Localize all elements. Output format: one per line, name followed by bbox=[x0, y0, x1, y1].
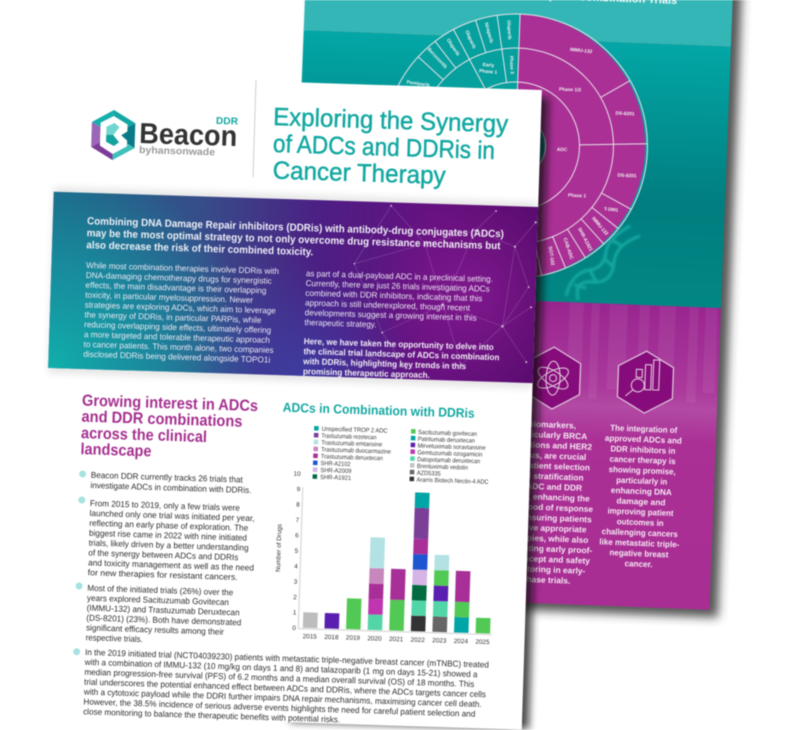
x axis labels: 2019 bbox=[346, 635, 361, 642]
bullet: tracked trials: investigate ADCs in combination with DDRis. bbox=[90, 480, 252, 495]
band magenta glow bbox=[48, 192, 538, 383]
band intro statement: also decrease the risk of their combined toxicity. bbox=[86, 240, 314, 258]
band right column text: the clinical trial landscape of ADCs in combination bbox=[303, 346, 500, 362]
wheel labels: Olaparib bbox=[445, 38, 461, 57]
back page shadow bbox=[290, 0, 744, 618]
chart legend: SHR-A1921 bbox=[320, 474, 352, 482]
DNA helix decoration bbox=[566, 226, 640, 300]
column two text: integration bbox=[598, 422, 684, 570]
bullet: most explored ADCs: respective trials. bbox=[86, 632, 143, 644]
column two text: integration: outcomes in bbox=[617, 516, 664, 528]
bullet: most explored ADCs bbox=[74, 582, 243, 647]
column two text: integration: approved ADCs and bbox=[605, 433, 682, 446]
wheel labels: CAB-ADC bbox=[562, 237, 574, 261]
front page sheet bbox=[37, 75, 542, 730]
sunburst chart bbox=[384, 14, 648, 278]
section heading bbox=[80, 393, 258, 464]
column two text: integration: like metastatic triple- bbox=[599, 536, 680, 549]
title: Cancer Therapy bbox=[272, 157, 447, 190]
bullet: 2019 trial: However, the 38.5% incidence of serious adverse events highlights the need for careful patient selection and bbox=[83, 696, 476, 719]
x axis labels: 2023 bbox=[432, 637, 447, 645]
teal panel background bbox=[294, 30, 731, 308]
band right column text bbox=[302, 268, 502, 382]
chart legend: SHR-A2009 bbox=[320, 467, 352, 475]
band left column text: reducing overlapping side effects, ultimately offering bbox=[84, 319, 272, 335]
bullet: most explored ADCs: significant efficacy results among their bbox=[86, 622, 224, 637]
section heading: and DDR combinations bbox=[81, 409, 243, 431]
column two text: integration: challenging cancers bbox=[602, 526, 678, 539]
bullet: most explored ADCs: (IMMU-132) and Trastuzumab Deruxtecan bbox=[87, 603, 240, 617]
band left column text: strategies are exploring ADCs, which aim to leverage bbox=[85, 299, 276, 316]
magenta panel background bbox=[282, 292, 721, 610]
bullet: trial timing: for new therapies for resistant cancers. bbox=[88, 567, 238, 582]
bars bbox=[303, 489, 494, 634]
band blue glow bbox=[48, 192, 538, 383]
column two text: integration: damage and bbox=[616, 496, 666, 507]
axes bbox=[298, 487, 496, 635]
column one text: biomarkers: and stratification bbox=[516, 470, 584, 483]
column one text: biomarkers: phase trials. bbox=[521, 574, 571, 586]
chart legend: Trastuzumab rezetecan bbox=[321, 433, 377, 441]
column two text: integration: cancer therapy is bbox=[609, 454, 676, 466]
chart legend: Trastuzumab duocarmazine bbox=[321, 446, 392, 456]
wheel labels: SHR-A1921 bbox=[576, 227, 594, 253]
divider bbox=[253, 80, 256, 177]
bullet: trial timing: reflecting an early phase of exploration. The bbox=[89, 518, 249, 533]
y axis labels: 3 bbox=[294, 579, 298, 586]
band left column text: effects, the main disadvantage is their overlapping bbox=[85, 280, 267, 295]
band right column text: combined with DDR inhibitors, indicating that this bbox=[305, 288, 482, 303]
column two icon: magnifier and bars hexagon bbox=[617, 350, 674, 414]
x axis labels: 2025 bbox=[475, 639, 490, 646]
band right column text: approach is still underexplored, though recent bbox=[305, 298, 471, 313]
band teal corner bbox=[48, 192, 538, 383]
chart legend bbox=[312, 425, 491, 486]
wheel labels: DS-8201 bbox=[617, 173, 637, 179]
bullet: 2019 trial: close monitoring to balance the therapeutic benefits with potential risks. bbox=[83, 706, 340, 724]
chart legend: Mirvetuximab soravtansine bbox=[417, 443, 486, 452]
band right column text: developments suggest a growing interest in this bbox=[305, 307, 477, 323]
column two text: integration: improving patient bbox=[607, 505, 674, 518]
band network nodes bbox=[350, 204, 537, 373]
x axis labels: 2015 bbox=[303, 633, 317, 641]
title: Exploring the Synergy bbox=[273, 103, 509, 138]
band right column text: with DDRis, highlighting key trends in this bbox=[302, 356, 467, 371]
y axis labels: 8 bbox=[296, 502, 300, 509]
bullet: trial timing: and toxicity management as well as the need bbox=[88, 557, 254, 573]
logo hexagon mark bbox=[91, 109, 136, 161]
band left column text: a more targeted and tolerable therapeutic approach bbox=[84, 329, 270, 345]
bullet: most explored ADCs: years explored Sacituzumab Govitecan bbox=[87, 593, 229, 607]
bullet: most explored ADCs: (DS-8201) (23%). Both have demonstrated bbox=[86, 612, 242, 627]
teal half of wheel bbox=[384, 14, 648, 278]
bullet: 2019 trial bbox=[71, 647, 489, 729]
wheel labels: Early bbox=[482, 62, 495, 69]
logo byline: byhansonwade bbox=[139, 145, 216, 158]
band left column text: disclosed DDRis being delivered alongside TOPO1i bbox=[83, 349, 271, 365]
bullet: trial timing: of the synergy between ADCs and DDRIs bbox=[88, 548, 238, 562]
band left column text: While most combination therapies involve DDRis with bbox=[86, 260, 280, 276]
band background bbox=[48, 192, 538, 383]
band right column text: therapeutic strategy. bbox=[304, 317, 377, 329]
band intro statement bbox=[86, 216, 504, 264]
column two text: integration: negative breast bbox=[609, 547, 669, 559]
y axis title: Number of Drugs bbox=[275, 524, 283, 572]
ring outlines and dividers bbox=[384, 14, 648, 278]
wheel labels: T-DM1 bbox=[604, 206, 619, 214]
wheel centre bbox=[486, 116, 546, 176]
bullet: tracked trials bbox=[79, 469, 252, 495]
chart legend: Brentuximab vedotin bbox=[417, 463, 469, 472]
column one text: biomarkers: for patient selection bbox=[510, 459, 590, 472]
wheel labels: Niraparib bbox=[483, 22, 494, 44]
column two text: integration: cancer. bbox=[624, 558, 653, 569]
x axis labels: 2018 bbox=[324, 634, 339, 641]
wheel labels: ADC bbox=[557, 147, 568, 153]
wheel labels: Phase 3 bbox=[508, 56, 515, 74]
column one text: biomarkers: in ADC and DDR bbox=[517, 480, 582, 493]
column one text: biomarkers bbox=[501, 418, 597, 587]
logo DDR tag: DDR bbox=[216, 116, 239, 128]
teal header band bbox=[304, 0, 735, 47]
x axis labels: 2020 bbox=[367, 635, 382, 643]
wheel labels: Phase 1/2 bbox=[559, 87, 582, 93]
band intro statement: may be the most optimal strategy to not only overcome drug resistance mechanisms but bbox=[87, 228, 501, 252]
column one text: biomarkers: trials, enhancing the bbox=[508, 490, 590, 504]
y axis labels: 1 bbox=[293, 609, 297, 617]
chart legend: Unspecified TROP 2 ADC bbox=[322, 426, 388, 435]
logo wordmark: Beacon bbox=[139, 118, 238, 153]
band right column text: promising therapeutic approach. bbox=[303, 366, 430, 380]
wheel labels: Phase 1 bbox=[479, 68, 498, 76]
section heading: landscape bbox=[80, 441, 152, 460]
front page: article bbox=[37, 74, 549, 730]
band left column text: DNA-damaging chemotherapy drugs for synergistic bbox=[86, 270, 272, 286]
bullet: trial timing: trials, likely driven by a better understanding bbox=[89, 538, 249, 553]
wheel labels bbox=[406, 20, 637, 266]
intro band bbox=[48, 187, 538, 388]
column one text: biomarkers: facilitating early proof- bbox=[502, 542, 593, 555]
column two text: integration: showing promise, bbox=[609, 464, 676, 477]
band left column text: the synergy of DDRis, in particular PARPis, while bbox=[84, 309, 262, 325]
column two text: integration: enhancing DNA bbox=[611, 485, 672, 497]
front page shadow bbox=[290, 90, 549, 729]
bullet: most explored ADCs: Most of the initiated trials (26%) over the bbox=[87, 583, 234, 597]
column two text: integration: DDR inhibitors in bbox=[610, 443, 676, 456]
column one text: biomarkers: particularly BRCA bbox=[515, 429, 587, 441]
section heading: Growing interest in ADCs bbox=[82, 393, 258, 415]
y axis labels: 2 bbox=[293, 594, 297, 601]
bullet: trial timing bbox=[76, 496, 256, 583]
band intro statement: Combining DNA Damage Repair inhibitors (DDRis) with antibody-drug conjugates (ADCs) bbox=[87, 216, 504, 240]
wheel labels: DS-8201 bbox=[615, 111, 635, 117]
band left column text: toxicity, in particular myelosuppression. Newer bbox=[85, 290, 253, 305]
wheel labels: IMMU-132 bbox=[590, 216, 609, 237]
magenta panel skyline texture bbox=[566, 303, 718, 403]
wheel labels: Phase 1 bbox=[568, 193, 587, 199]
stacked bar chart bbox=[273, 470, 497, 646]
band right column text: Currently, there are just 26 trials investigating ADCs bbox=[306, 278, 490, 294]
bullet: 2019 trial: with a cytotoxic payload while the DDRI further impairs DNA repair mechanisms, maximising cancer cell death. bbox=[83, 687, 482, 709]
wheel labels: Olaparib bbox=[505, 20, 512, 40]
chart legend: Sacituzumab govitecan bbox=[418, 429, 478, 438]
wheel labels: Berzosertib bbox=[426, 47, 448, 70]
logo: Beacon DDR by Hanson Wade bbox=[91, 109, 239, 164]
y axis labels: 10 bbox=[293, 471, 301, 478]
column one text: biomarkers: therapies, while also bbox=[506, 532, 589, 545]
section heading: across the clinical bbox=[81, 425, 207, 446]
column two text: integration: particularly in bbox=[616, 475, 667, 487]
band right column text: as part of a dual-payload ADC in a preclinical setting. bbox=[306, 268, 493, 284]
chart legend: Patritumab deruxtecan bbox=[418, 436, 475, 445]
back page: clinical trial landscape poster bbox=[282, 0, 744, 618]
band right column text: Here, we have taken the opportunity to delve into bbox=[304, 336, 494, 352]
bullet: trial timing: biggest rise came in 2022 with nine initiated bbox=[89, 528, 247, 543]
y axis labels: 7 bbox=[296, 517, 300, 524]
chart legend: Ararris Biotech Nectin-4 ADC bbox=[416, 477, 489, 486]
band left column text bbox=[83, 260, 280, 365]
chart legend: AZD5335 bbox=[417, 470, 441, 478]
chart legend: Trastuzumab deruxtecan bbox=[321, 453, 383, 462]
chart legend: Trastuzumab emtansine bbox=[321, 439, 383, 448]
y axis labels bbox=[289, 471, 301, 632]
y axis labels: 4 bbox=[294, 563, 298, 570]
wheel labels: IMMU-132 bbox=[570, 47, 593, 55]
title bbox=[271, 103, 509, 192]
column two text: integration: The integration of bbox=[610, 423, 678, 435]
column one icon: atom hexagon bbox=[525, 346, 581, 410]
x axis labels: 2022 bbox=[410, 637, 425, 644]
band left column text: to cancer patients. This month alone, two companies bbox=[83, 339, 274, 355]
bullet: trial timing: From 2015 to 2019, only a few trials were bbox=[90, 498, 240, 513]
column one text: biomarkers: likelihood of response bbox=[504, 501, 594, 514]
bullet: 2019 trial: trial underscores the potential enhanced effect between ADCs and DDRis, where the ADCs targets cancer cells bbox=[84, 677, 486, 699]
column one text: biomarkers: receive appropriate bbox=[509, 522, 587, 534]
band shadow bbox=[48, 187, 538, 388]
magenta half of wheel bbox=[511, 14, 645, 278]
bullet: 2019 trial: In the 2019 initiated trial (NCT04039230) patients with metastatic triple-negative breast cancer (mTNBC) treated bbox=[85, 647, 489, 670]
wheel labels: Pamiparib bbox=[406, 79, 430, 89]
y axis labels: 9 bbox=[297, 486, 301, 493]
y axis labels: 5 bbox=[295, 548, 299, 555]
title: of ADCs and DDRis in bbox=[273, 130, 495, 165]
column one text: biomarkers: monitoring in early- bbox=[507, 563, 586, 576]
x axis labels: 2024 bbox=[454, 638, 469, 645]
bullet: tracked trials: Beacon DDR currently tracks 26 trials that bbox=[91, 470, 244, 485]
y axis labels: 0 bbox=[292, 625, 296, 632]
column one text: biomarkers: of-concept and safety bbox=[503, 552, 590, 566]
bullet: 2019 trial: with a combination of IMMU-132 (10 mg/kg on days 1 and 8) and talazoparib (1 mg on days 15-21) showed a bbox=[84, 657, 478, 679]
wheel labels: Olaparib bbox=[463, 29, 477, 50]
wheel labels: SOT-102 bbox=[547, 246, 555, 266]
band network texture bbox=[351, 205, 536, 372]
y axis labels: 6 bbox=[295, 532, 299, 540]
x axis labels bbox=[303, 633, 490, 646]
column one text: biomarkers: mutations and HER2 bbox=[510, 439, 593, 452]
column one text: biomarkers: status, are crucial bbox=[515, 449, 586, 462]
bullet: 2019 trial: median progression-free survival (PFS) of 6.2 months and a median overall survival (OS) of 18 months. This bbox=[84, 667, 474, 689]
column one text: biomarkers: Biomarkers, bbox=[527, 419, 576, 431]
chart legend: Datopotamab deruxtecan bbox=[417, 456, 481, 465]
chart legend: Gemtuzumab ozogamicin bbox=[417, 449, 483, 458]
bullet: trial timing: launched only one trial was initiated per year, bbox=[89, 508, 255, 523]
chart legend: SHR-A2102 bbox=[321, 460, 351, 468]
x axis labels: 2021 bbox=[389, 636, 404, 643]
chart title: ADCs in Combination with DDRis bbox=[283, 400, 475, 421]
column one text: biomarkers: and ensuring patients bbox=[505, 511, 592, 524]
